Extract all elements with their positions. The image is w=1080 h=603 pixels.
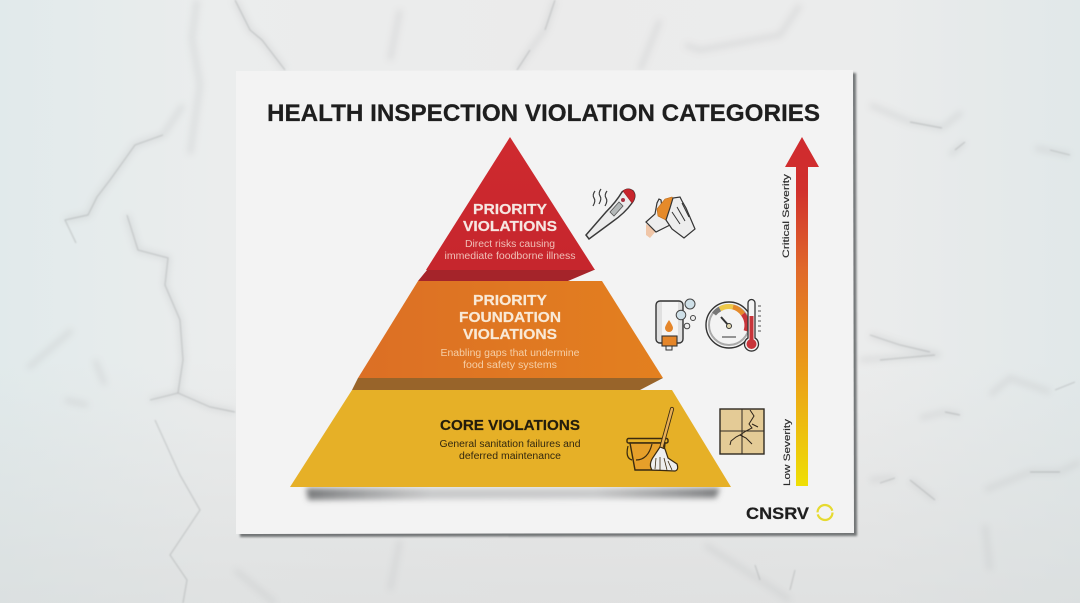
severity arrow: [785, 137, 819, 486]
tier: priority violations: PRIORITY: [473, 202, 547, 218]
tier: priority foundation violations: VIOLATIONS: [463, 327, 557, 343]
logo: CNSRV: CNSRV: [746, 505, 809, 523]
tier: core violations: deferred maintenance: [459, 451, 561, 462]
tier: core violations: General sanitation failures and: [440, 439, 580, 450]
title: HEALTH INSPECTION VIOLATION CATEGORIES: [267, 100, 820, 127]
icon: temperature gauge with thermometer: [706, 300, 761, 351]
tier: priority violations: [418, 137, 595, 281]
tier: priority foundation violations: Enabling gaps that undermine: [440, 348, 580, 359]
tier: priority foundation violations: FOUNDATION: [459, 310, 561, 326]
pyramid: [290, 137, 731, 500]
tier: priority foundation violations: food safety systems: [463, 360, 557, 371]
icon: thermometer with heat waves: [586, 189, 635, 239]
icon: mop and bucket: [627, 409, 678, 471]
tier: core violations: CORE VIOLATIONS: [440, 418, 580, 434]
logo: CNSRV: [746, 505, 832, 523]
tier: core violations: [290, 390, 731, 487]
icon: soap dispenser with bubbles: [656, 299, 696, 350]
paper sheet: [236, 70, 854, 534]
tier: priority violations: immediate foodborne illness: [444, 251, 576, 262]
tier: priority violations: Direct risks causing: [465, 239, 555, 250]
label: critical severity: Critical Severity: [781, 174, 792, 258]
tier: priority violations: VIOLATIONS: [463, 219, 557, 235]
pyramid base shadow: [306, 488, 720, 500]
tier: priority foundation violations: PRIORITY: [473, 293, 547, 309]
icon: cracked floor tile: [720, 409, 764, 454]
tier: priority foundation violations: [352, 281, 663, 390]
label: low severity: Low Severity: [782, 419, 793, 486]
paper sheet shadow: [240, 73, 857, 537]
icon: gloved hands scrubbing with sponge: [646, 197, 695, 238]
